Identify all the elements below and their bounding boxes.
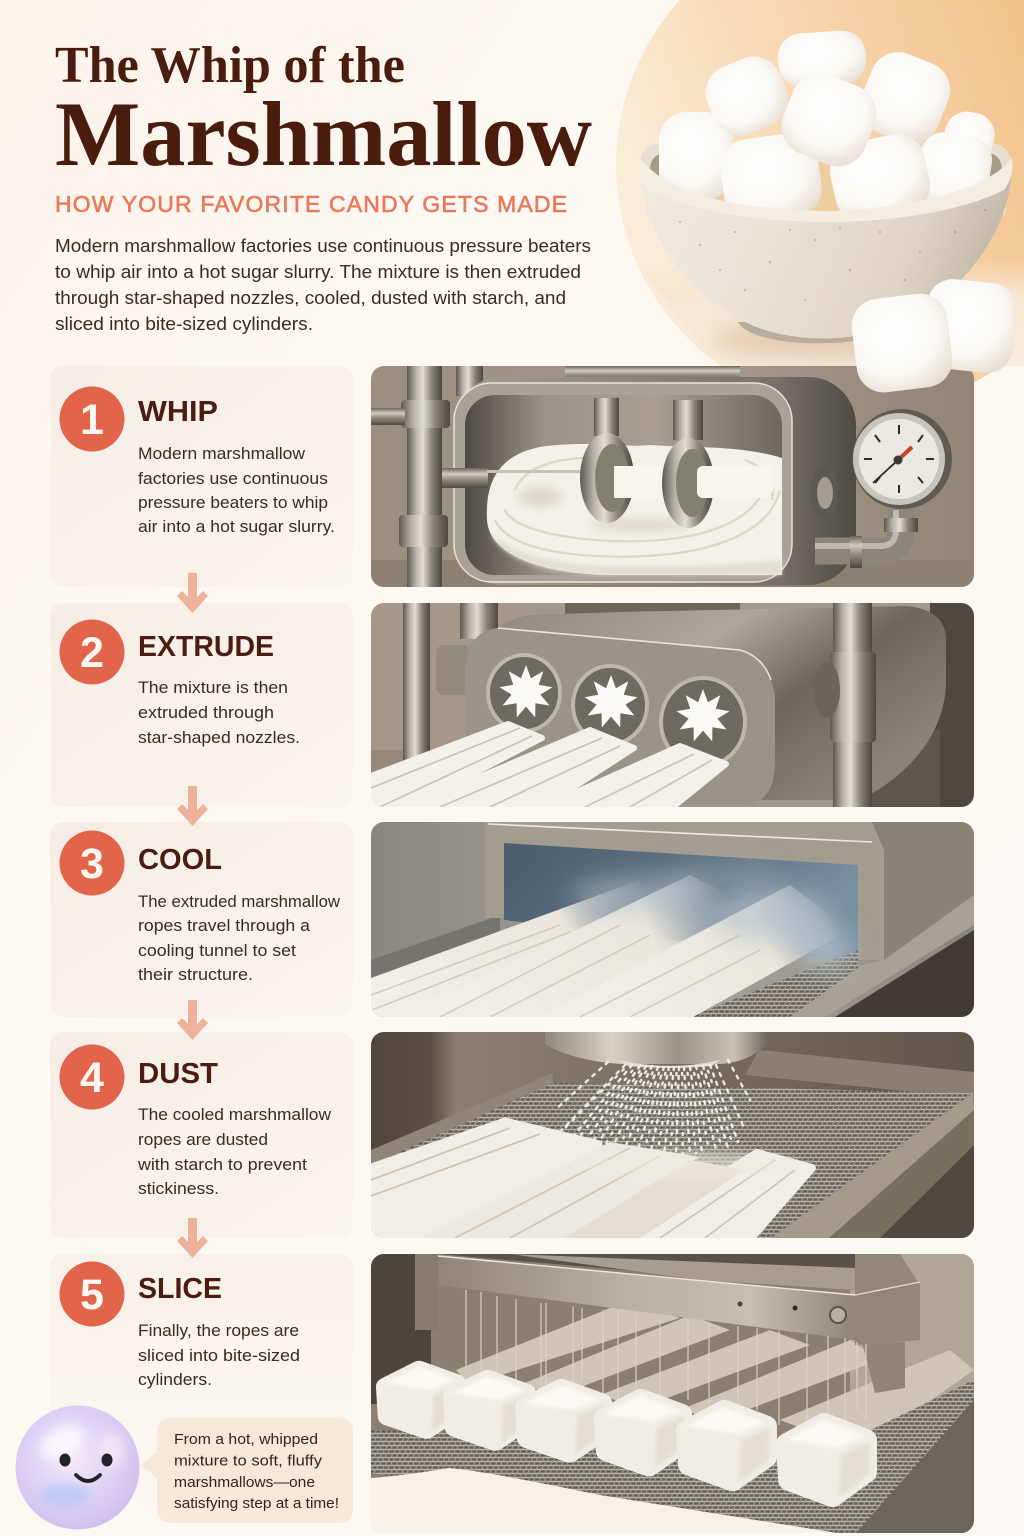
text: cool description: The extruded marshmallow [138,892,341,911]
arrow: step 3 to 4 [177,1000,208,1040]
tunnel opening [504,843,858,962]
number badge 3: 3 [80,840,104,888]
title: The Whip of the [55,37,405,94]
bowl front [640,158,1013,343]
cutting wires [466,1290,866,1430]
text: dust description: ropes are dusted [138,1130,268,1149]
image: cooling tunnel [371,822,974,1017]
arrow: step 1 to 2 [177,573,208,613]
intro text: sliced into bite-sized cylinders. [55,313,313,334]
image: extrusion machine [371,603,974,807]
heading: whip: WHIP [138,396,218,428]
white cloth [371,1468,856,1536]
text: extrude description [138,678,300,747]
callout text: mixture to soft, fluffy [174,1452,323,1470]
text: dust description: with starch to prevent [137,1155,307,1174]
text: dust description: The cooled marshmallow [138,1105,332,1124]
number badge 5 [60,1262,124,1326]
callout text: marshmallows—one [174,1474,315,1491]
arrow: step 4 to 5 [177,1218,208,1258]
text: cool description: cooling tunnel to set [138,941,296,960]
intro text [55,235,591,334]
text: whip description [138,444,335,536]
callout: speech bubble [141,1418,353,1523]
text: extrude description: extruded through [138,703,274,722]
image: starch dusting [371,1032,974,1238]
star nozzles [488,655,745,766]
left pipes [407,366,442,587]
panel: step 2 extrude [50,603,353,807]
text: cool description: their structure. [138,965,253,984]
text: dust description [137,1105,332,1198]
text: slice description: cylinders. [138,1370,212,1389]
callout text: From a hot, whipped [174,1431,318,1448]
image: slicing machine [371,1254,974,1536]
cold mist [570,865,853,972]
cutter bar [415,1254,920,1393]
text: cool description: ropes travel through a [138,916,311,935]
panel: step 4 dust [50,1032,353,1238]
number badge 2: 2 [80,629,104,677]
knob [810,481,812,506]
tunnel frame [485,822,884,960]
text: whip description: pressure beaters to whip [138,493,328,512]
right pipe [833,603,872,807]
number badge 5: 5 [80,1271,104,1319]
number badge 1 [60,386,124,452]
number badge 2 [60,620,124,684]
title: Marshmallow [55,83,592,185]
text: whip description: Modern marshmallow [138,444,306,463]
pressure gauge [852,409,952,509]
starch hopper [545,1032,767,1068]
number badge 4: 4 [80,1054,104,1102]
text: cool description [138,892,341,984]
text: slice description: Finally, the ropes are [138,1321,299,1340]
heading: dust: DUST [138,1058,219,1090]
elbow pipe [815,508,901,551]
marshmallow ropes [371,875,850,1017]
panel: step 1 whip [50,366,353,587]
dusted marshmallow ropes [371,1120,812,1238]
bowl speckles [679,209,986,301]
text: dust description: stickiness. [138,1179,219,1198]
mascot face [60,1454,112,1481]
callout text [174,1431,339,1512]
number badge 1: 1 [80,396,104,444]
subtitle: HOW YOUR FAVORITE CANDY GETS MADE [55,191,567,217]
heading: cool: COOL [138,844,222,876]
arrow: step 2 to 3 [177,786,208,826]
loose marshmallows [849,277,1019,395]
extruded ropes [371,724,726,807]
image: whipping machine [371,366,974,587]
intro text: Modern marshmallow factories use continuous pressure beaters [55,235,591,256]
intro text: to whip air into a hot sugar slurry. The mixture is then extruded [55,261,581,282]
panel: step 5 slice [50,1254,353,1536]
mixture [487,444,782,575]
text: slice description [138,1321,300,1389]
back ropes [456,1308,974,1430]
conveyor belt [371,1083,973,1238]
heading: slice: SLICE [138,1273,222,1305]
panel: step 3 cool [50,822,353,1017]
beater shafts and discs [580,398,712,528]
text: slice description: sliced into bite-sized [138,1346,300,1365]
marshmallows in bowl [659,29,999,227]
falling starch [552,1060,750,1155]
bowl back and interior [640,143,1012,215]
mascot: pearl marshmallow [16,1406,140,1530]
sliced marshmallow cubes [384,1367,870,1498]
heading: extrude: EXTRUDE [138,631,274,663]
text: extrude description: The mixture is then [138,678,288,697]
intro text: through star-shaped nozzles, cooled, dusted with starch, and [55,287,566,308]
text: extrude description: star-shaped nozzles. [138,728,300,747]
number badge 4 [60,1044,124,1110]
conveyor mesh [690,950,858,1017]
text: whip description: air into a hot sugar slurry. [138,517,335,536]
number badge 3 [60,830,124,896]
title [55,37,592,185]
conveyor mesh [371,1380,974,1533]
callout text: satisfying step at a time! [174,1495,339,1512]
hero image: bowl of marshmallows on peach circle [616,0,1024,410]
text: whip description: factories use continuous [138,469,328,488]
